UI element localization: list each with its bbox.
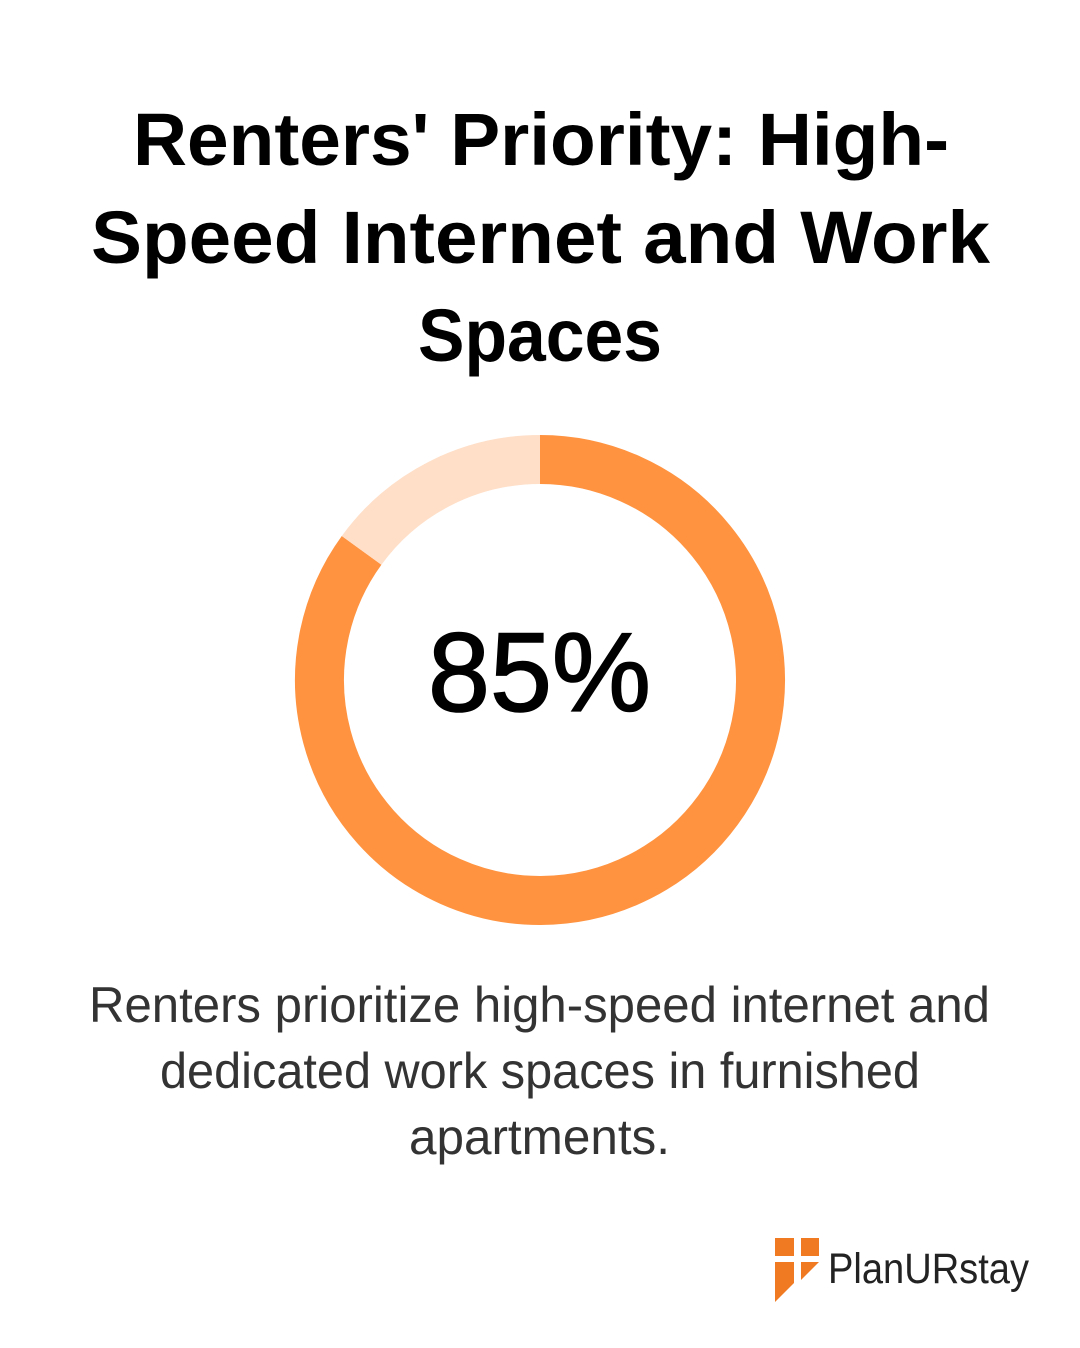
description text: Renters prioritize high-speed internet and (89, 977, 990, 1033)
description text (89, 977, 990, 1165)
title (91, 98, 991, 377)
icon: logo mark (775, 1238, 819, 1302)
filled arc: 85% (319, 460, 760, 900)
remaining arc: 15% (362, 460, 540, 550)
logo wordmark: PlanURstay (828, 1245, 1029, 1293)
title: Speed Internet and Work (91, 196, 991, 279)
description text: apartments. (409, 1109, 670, 1165)
title: Renters' Priority: High- (133, 98, 949, 181)
donut chart: 85% (319, 460, 760, 900)
logo: PlanURstay (775, 1238, 1029, 1302)
title: Spaces (418, 294, 662, 377)
description text: dedicated work spaces in furnished (160, 1043, 920, 1099)
big number: 85% (428, 610, 651, 735)
